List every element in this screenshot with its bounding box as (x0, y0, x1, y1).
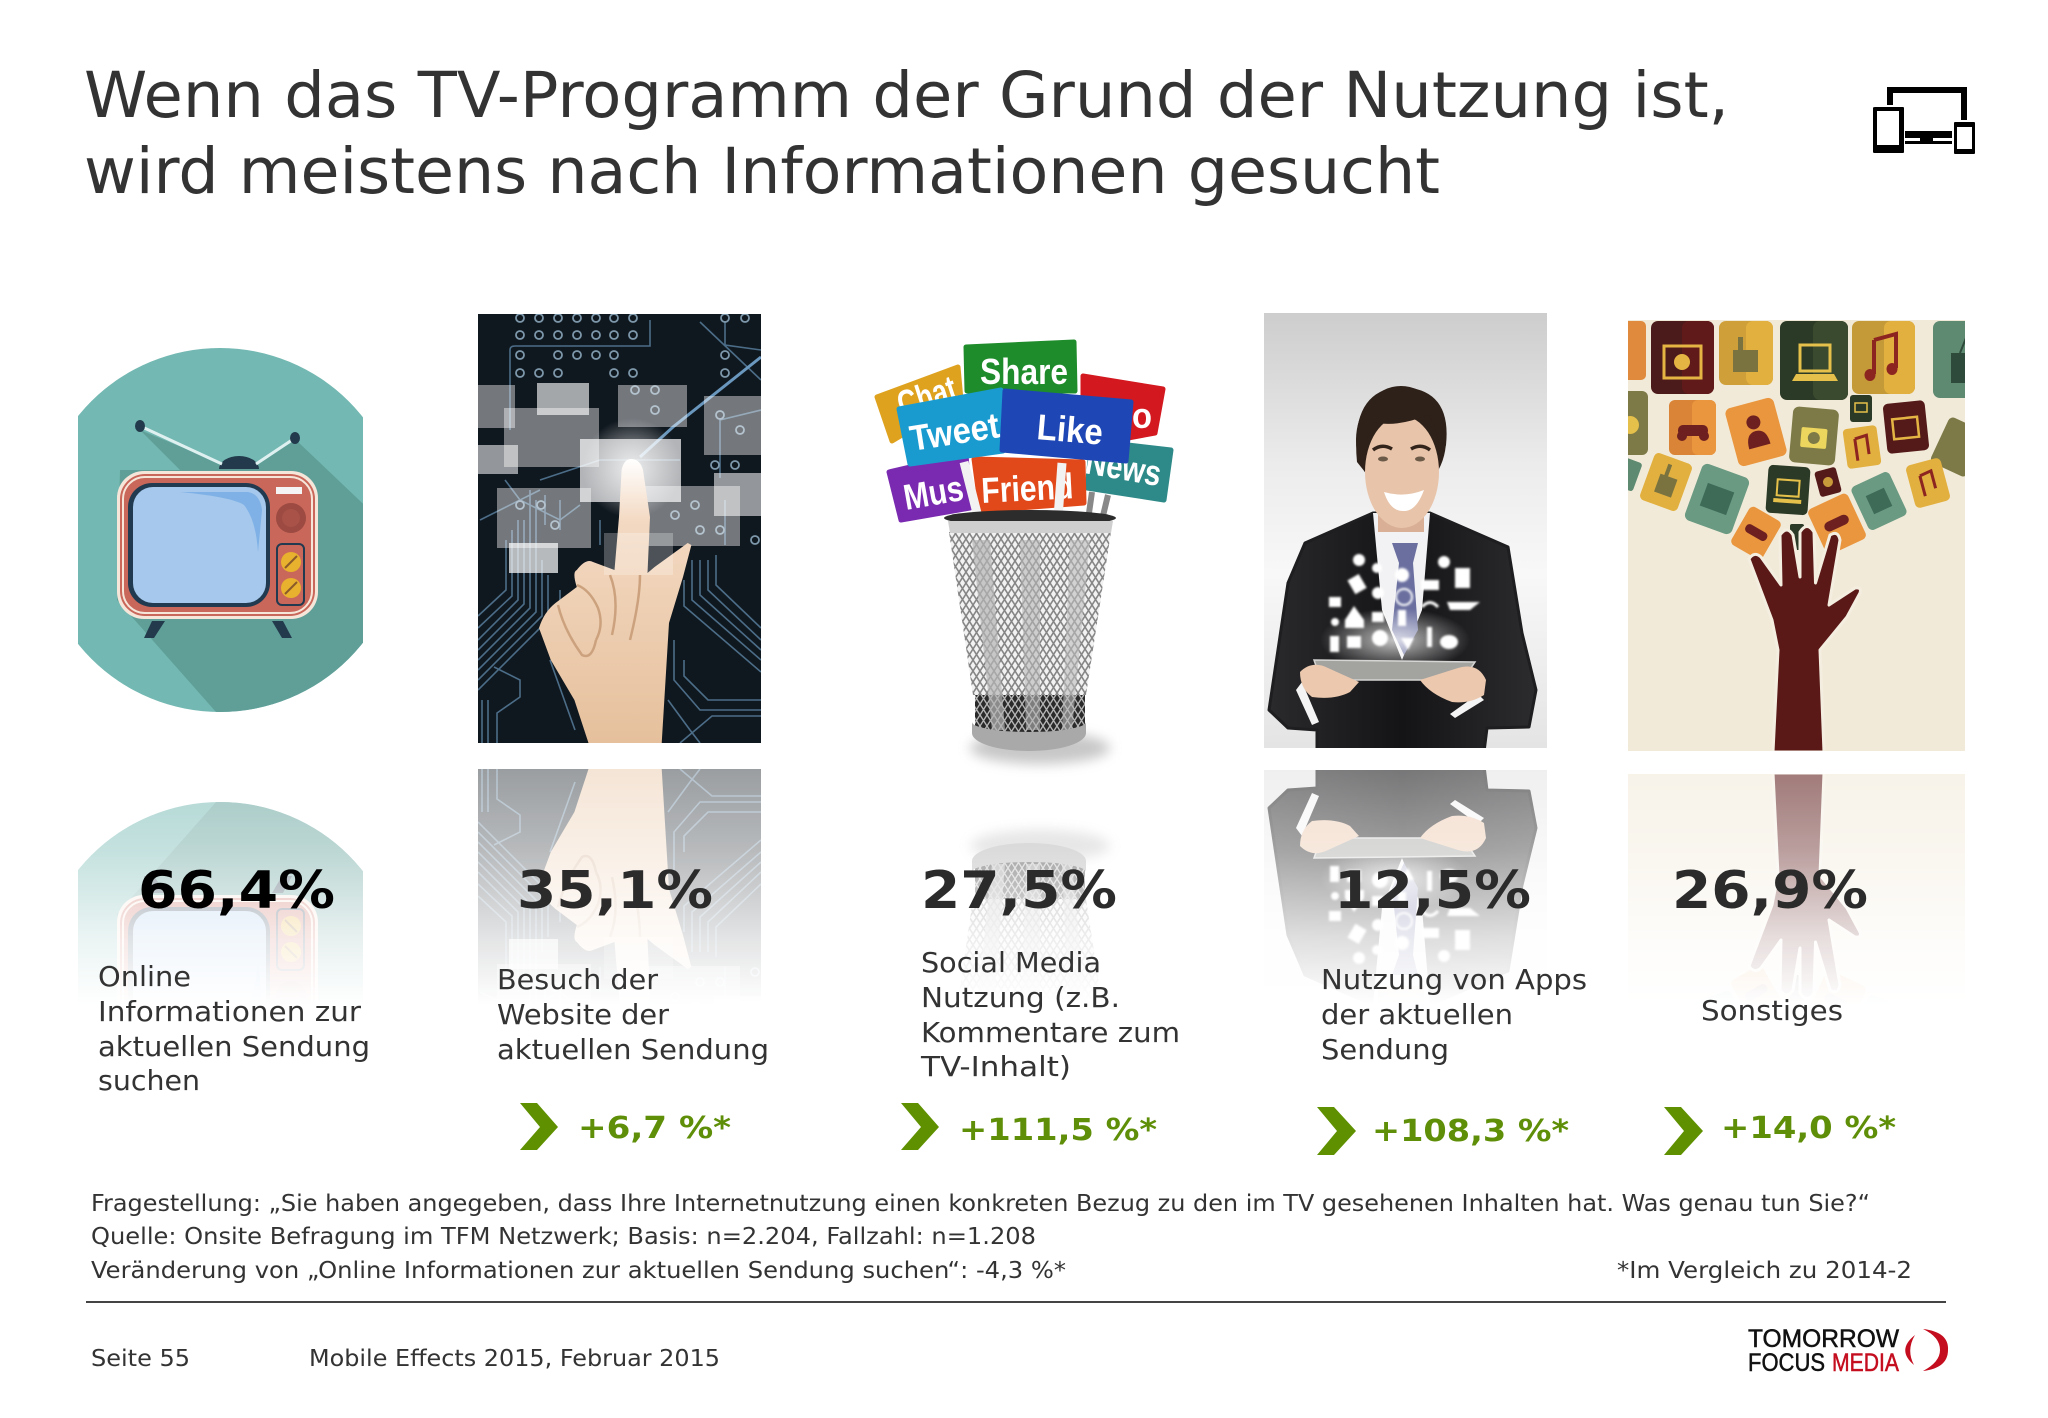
lower row icons (1614, 452, 1951, 561)
tablet and hands (1296, 660, 1486, 725)
reflection: bucket (962, 827, 1109, 974)
label: apps: Nutzung von Apps (1321, 963, 1587, 996)
value 12,5%: 12,5% (1334, 861, 1531, 921)
arrow: change other (1664, 1107, 1703, 1155)
change +111,5 %*: +111,5 %* (959, 1113, 1157, 1148)
reflection: hand (1628, 774, 1965, 988)
glow (590, 422, 674, 514)
label: website visit: Website der (497, 998, 670, 1031)
sign: Like: Like (1035, 406, 1105, 453)
label: social media: TV-Inhalt) (920, 1050, 1071, 1083)
arrow: change website (520, 1103, 558, 1150)
sign: News: News (1083, 441, 1165, 494)
TV backdrop circle (30, 340, 410, 720)
label: online information: Online (98, 960, 191, 993)
bucket (944, 510, 1116, 751)
label: apps: der aktuellen (1321, 998, 1513, 1031)
change +108,3 %*: +108,3 %* (1372, 1114, 1569, 1149)
change +6,7 %*: +6,7 %* (578, 1111, 731, 1146)
TV set (117, 420, 318, 638)
hand (1749, 526, 1860, 752)
panel: touch screen photo (478, 314, 761, 743)
circuit traces (478, 320, 761, 743)
reflection: TV image (78, 802, 363, 988)
footer text: Seite 55 (91, 1344, 190, 1372)
floating app icons (1329, 554, 1480, 652)
logo: Tomorrow Focus Media: MEDIA (1832, 1349, 1899, 1377)
footer text (91, 1344, 720, 1372)
sign: Tweet (899, 390, 1003, 464)
TV long shadow (117, 430, 380, 712)
sign: Share (966, 342, 1075, 392)
label: website visit: aktuellen Sendung (497, 1033, 769, 1066)
label: apps: Sendung (1321, 1033, 1449, 1066)
label: website visit (497, 963, 769, 1066)
panel: hand and media icon tree (1605, 320, 1987, 752)
column 5: other (1664, 861, 1896, 1155)
source notes: Veränderung von „Online Informationen zur aktuellen Sendung suchen“: -4,3 %* (91, 1256, 1066, 1284)
label: social media: Social Media (921, 946, 1101, 979)
panel: businessman with tablet (1264, 313, 1547, 752)
column 3: social media (901, 861, 1180, 1150)
glow above tablet (1320, 608, 1470, 672)
source notes: *Im Vergleich zu 2014-2 (1617, 1256, 1912, 1284)
logo: Tomorrow Focus Media (1748, 1325, 1948, 1377)
sign: Like (1002, 391, 1131, 461)
value 35,1%: 35,1% (517, 861, 713, 921)
footer text: Mobile Effects 2015, Februar 2015 (309, 1344, 720, 1372)
label: social media: Nutzung (z.B. (921, 981, 1120, 1014)
column 4: apps (1317, 861, 1587, 1155)
column 1: online information (98, 861, 370, 1097)
label: apps (1321, 963, 1587, 1066)
neck and face (1356, 386, 1447, 532)
floor shadow (970, 732, 1110, 764)
arrow: change social media (901, 1103, 939, 1150)
change +14,0 %*: +14,0 %* (1721, 1111, 1896, 1146)
sign: Chat (877, 367, 962, 441)
sign: Chat: Chat (892, 367, 962, 425)
arrow: change apps (1317, 1107, 1356, 1155)
top row icons (1620, 321, 1983, 400)
panel: social media bucket (877, 342, 1171, 764)
label: website visit: Besuch der (497, 963, 658, 996)
source notes (91, 1189, 1912, 1284)
sign: Tweet: Tweet (907, 404, 1002, 459)
sign poles (964, 462, 1062, 518)
icon: devices (1873, 87, 1975, 154)
floating glass tiles (478, 383, 761, 573)
value 27,5%: 27,5% (921, 861, 1117, 921)
source notes: Quelle: Onsite Befragung im TFM Netzwerk; Basis: n=2.204, Fallzahl: n=1.208 (91, 1222, 1036, 1250)
label: other: Sonstiges (1701, 994, 1843, 1027)
title: wird meistens nach Informationen gesucht (84, 135, 1440, 208)
hand (539, 459, 691, 743)
reflection: businessman (1264, 770, 1547, 988)
sign: Music: Mus (900, 467, 966, 518)
label: social media: Kommentare zum (921, 1016, 1180, 1049)
shirt (1373, 513, 1430, 660)
label: online information: suchen (98, 1064, 200, 1097)
title: Wenn das TV-Programm der Grund der Nutzung ist, (84, 59, 1729, 132)
source notes: Fragestellung: „Sie haben angegeben, dass Ihre Internetnutzung einen konkreten Bezug zu den im TV gesehenen Inhalten hat. Was genau tun Sie?“ (91, 1189, 1870, 1217)
logo: Tomorrow Focus Media: TOMORROW (1748, 1325, 1899, 1353)
sign: Music (889, 454, 970, 520)
value 26,9%: 26,9% (1672, 861, 1868, 921)
label: online information: Informationen zur (98, 995, 361, 1028)
label: social media (920, 946, 1180, 1083)
middle row icons (1628, 391, 1965, 476)
sign: Video (1083, 376, 1163, 438)
column 2: website visit (497, 861, 769, 1150)
panel: TV image (30, 340, 410, 720)
label: online information (98, 960, 370, 1097)
sign: Share: Share (980, 351, 1068, 392)
value 66,4%: 66,4% (138, 861, 335, 921)
sign: Video: o (1132, 395, 1152, 436)
label: online information: aktuellen Sendung (98, 1030, 370, 1063)
suit (1269, 513, 1536, 752)
logo: Tomorrow Focus Media: FOCUS (1748, 1349, 1825, 1377)
sign: Friend: Friend (980, 465, 1074, 511)
reflection: touch screen photo (478, 769, 761, 984)
circuit holes (516, 314, 759, 544)
tie (1392, 543, 1418, 655)
title (84, 59, 1729, 208)
